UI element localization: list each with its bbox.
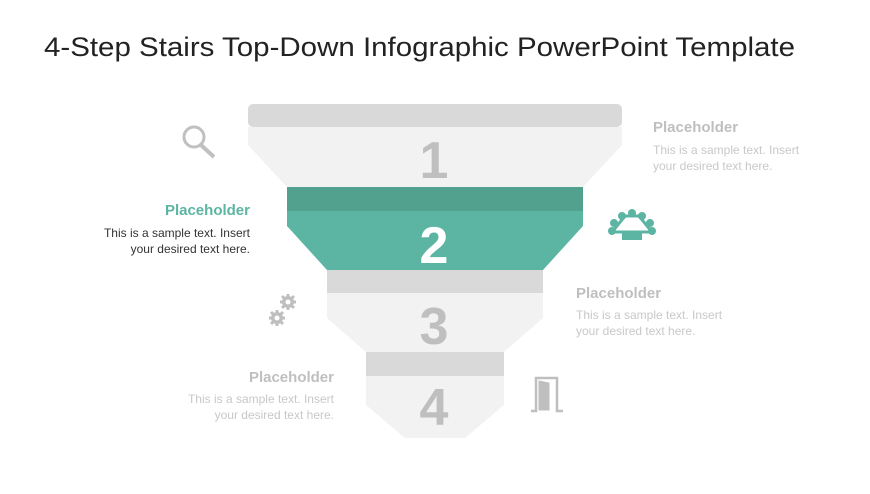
text block: step 1 [653, 119, 800, 173]
stage 1: 1 [420, 132, 448, 190]
text block: step 3: Placeholder [576, 285, 661, 302]
stage 4: 4 [420, 379, 449, 437]
text block: step 2 [104, 202, 251, 256]
text block: step 4: Placeholder [249, 369, 334, 386]
stage 3 [327, 270, 543, 356]
stage 1 [248, 104, 622, 190]
stage 4 [366, 352, 504, 438]
stage 2 [287, 187, 583, 275]
title: 4-Step Stairs Top-Down Infographic PowerPoint Template [44, 32, 795, 62]
funnel [248, 104, 622, 438]
text block: step 4: This is a sample text. Insert [188, 392, 335, 406]
stage 3: 3 [420, 298, 448, 356]
icon: gears [269, 294, 296, 326]
icon: meeting table [608, 209, 656, 240]
icon: magnifier [184, 127, 214, 157]
text block: step 4: your desired text here. [215, 408, 334, 422]
text block: step 1: Placeholder [653, 119, 738, 136]
icon: door [531, 378, 563, 411]
text block: step 2: your desired text here. [131, 242, 250, 256]
text block: step 2: This is a sample text. Insert [104, 226, 251, 240]
text block: step 3: This is a sample text. Insert [576, 308, 723, 322]
text block: step 1: your desired text here. [653, 159, 772, 173]
text block: step 3 [576, 285, 723, 338]
text block: step 3: your desired text here. [576, 324, 695, 338]
text block: step 1: This is a sample text. Insert [653, 143, 800, 157]
text block: step 2: Placeholder [165, 202, 250, 219]
stage 2: 2 [420, 217, 448, 275]
text block: step 4 [188, 369, 335, 422]
